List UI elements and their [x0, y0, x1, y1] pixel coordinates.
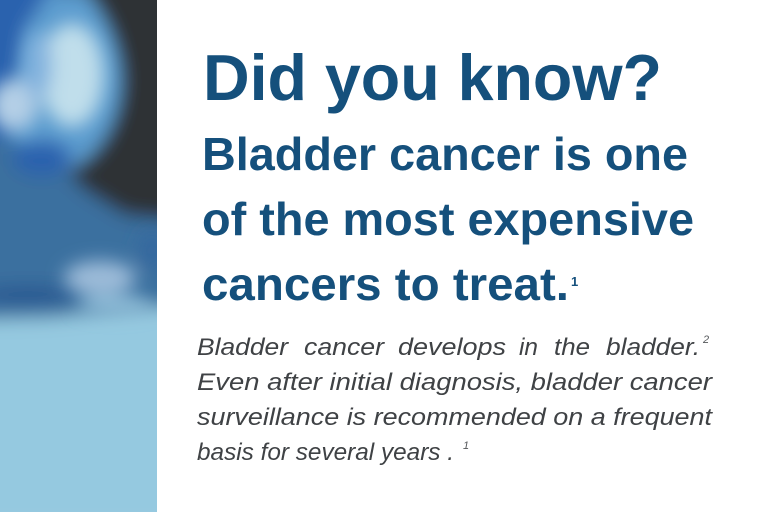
panel: blurred photo strip	[0, 0, 157, 512]
body text: explanation	[197, 334, 713, 466]
body text: explanation: Even after initial diagnosis, bladder cancer	[197, 369, 713, 396]
subheading: expensive cancer statement	[202, 128, 694, 310]
subheading: expensive cancer statement: of the most expensive	[202, 193, 694, 245]
heading: did you know: Did you know?	[203, 41, 662, 114]
body text: explanation: surveillance is recommended on a frequent	[197, 404, 713, 431]
footnote marker 1: 1	[571, 274, 578, 289]
body text: explanation: Bladder	[197, 334, 289, 361]
footnote marker 1: 1	[463, 440, 469, 452]
body text: explanation: cancer	[304, 334, 385, 361]
body text: explanation: basis for several years .	[197, 439, 454, 466]
body text: explanation: in	[519, 334, 538, 361]
subheading: expensive cancer statement: cancers to treat.	[202, 258, 569, 310]
footnote marker 2: 2	[702, 334, 709, 346]
subheading: expensive cancer statement: Bladder cancer is one	[202, 128, 688, 180]
body text: explanation: bladder.	[606, 334, 700, 361]
body text: explanation: develops	[398, 334, 506, 361]
body text: explanation: the	[554, 334, 590, 361]
